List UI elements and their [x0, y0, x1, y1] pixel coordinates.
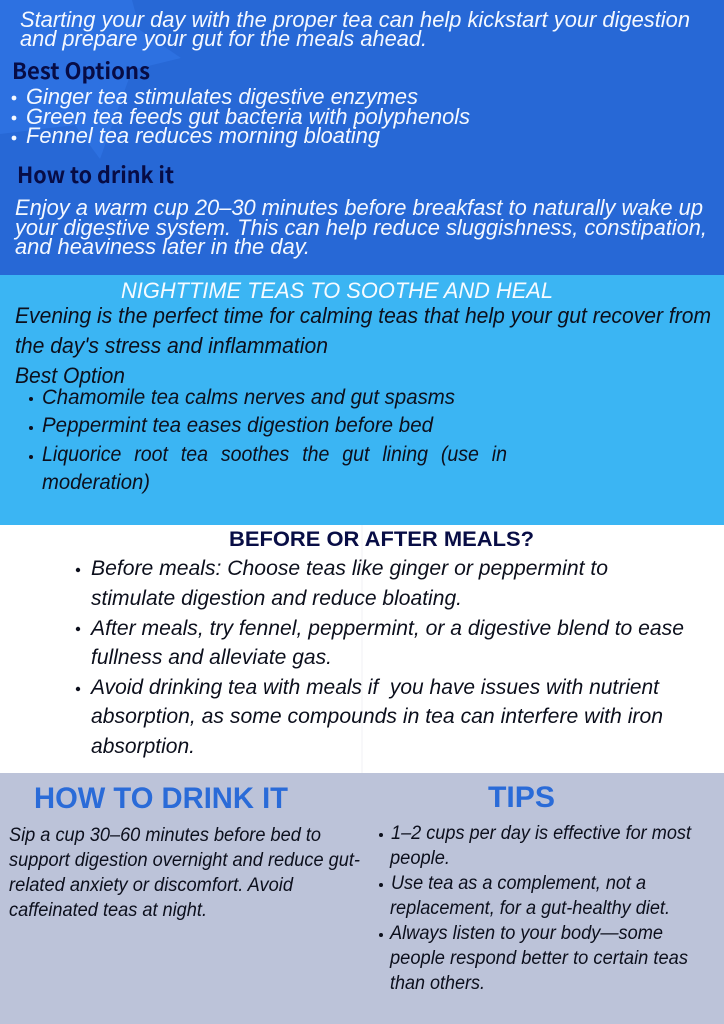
- text: bedtime advice: Sip a cup 30–60 minutes before bed to: [9, 825, 321, 846]
- list: best options: Green tea feeds gut bacteria with polyphenols: [26, 104, 470, 129]
- list: meal timing: absorption, as some compounds in tea can interfere with iron: [91, 705, 663, 728]
- intro text: [20, 7, 690, 51]
- list: night teas: Chamomile tea calms nerves and gut spasms: [42, 386, 455, 409]
- list: meal timing: stimulate digestion and reduce bloating.: [91, 587, 462, 610]
- list: best options: Ginger tea stimulates digestive enzymes: [26, 84, 418, 109]
- list: tips: Use tea as a complement, not a: [391, 873, 646, 894]
- how to drink text: [13, 195, 707, 259]
- intro text: the day's stress and inflammation: [15, 333, 328, 358]
- list: meal timing: [76, 557, 684, 758]
- text: bedtime advice: [9, 825, 360, 921]
- intro text: [15, 303, 711, 388]
- list: meal timing: After meals, try fennel, peppermint, or a digestive blend to ease: [89, 617, 684, 640]
- list: night teas: moderation): [42, 471, 150, 494]
- list: tips: people.: [389, 848, 450, 869]
- intro text: Evening is the perfect time for calming teas that help your gut recover from: [15, 303, 711, 328]
- list: tips: [379, 823, 692, 994]
- text: bedtime advice: related anxiety or discomfort. Avoid: [9, 875, 294, 896]
- list: night teas: [29, 386, 507, 494]
- list: night teas: Liquorice root tea soothes the gut lining (use in: [42, 443, 507, 466]
- panel: before or after meals: [0, 525, 724, 773]
- heading: how to drink it: HOW TO DRINK IT: [34, 782, 288, 815]
- panel: morning teas: [0, 0, 724, 275]
- heading: tips: TIPS: [488, 781, 555, 814]
- list: tips: Always listen to your body—some: [389, 923, 663, 944]
- list: tips: 1–2 cups per day is effective for most: [391, 823, 692, 844]
- how to drink text: and heaviness later in the day.: [15, 234, 310, 259]
- panel: nighttime teas: [0, 275, 724, 525]
- heading: before or after meals: BEFORE OR AFTER MEALS?: [229, 527, 534, 551]
- heading: how to drink it: How to drink it: [17, 158, 174, 190]
- intro text: Starting your day with the proper tea can help kickstart your digestion: [20, 7, 690, 32]
- heading: best options: Best Options: [12, 54, 150, 86]
- panel: how to drink and tips: [0, 773, 724, 1024]
- list: meal timing: Before meals: Choose teas like ginger or peppermint to: [91, 557, 608, 580]
- list: best options: Fennel tea reduces morning bloating: [26, 123, 381, 148]
- intro text: Best Option: [15, 363, 125, 388]
- list: best options: [12, 84, 470, 148]
- how to drink text: your digestive system. This can help reduce sluggishness, constipation,: [13, 215, 707, 240]
- list: tips: than others.: [390, 973, 485, 994]
- heading: nighttime teas: NIGHTTIME TEAS TO SOOTHE AND HEAL: [121, 278, 553, 303]
- text: bedtime advice: support digestion overnight and reduce gut-: [9, 850, 360, 871]
- how to drink text: Enjoy a warm cup 20–30 minutes before breakfast to naturally wake up: [15, 195, 703, 220]
- text: bedtime advice: caffeinated teas at night.: [9, 900, 207, 921]
- list: tips: people respond better to certain teas: [389, 948, 688, 969]
- list: night teas: Peppermint tea eases digestion before bed: [42, 414, 434, 437]
- list: meal timing: absorption.: [91, 735, 195, 758]
- intro text: and prepare your gut for the meals ahead.: [20, 26, 427, 51]
- list: meal timing: fullness and alleviate gas.: [91, 646, 332, 669]
- list: meal timing: Avoid drinking tea with meals if you have issues with nutrient: [89, 676, 660, 699]
- list: tips: replacement, for a gut-healthy diet.: [390, 898, 670, 919]
